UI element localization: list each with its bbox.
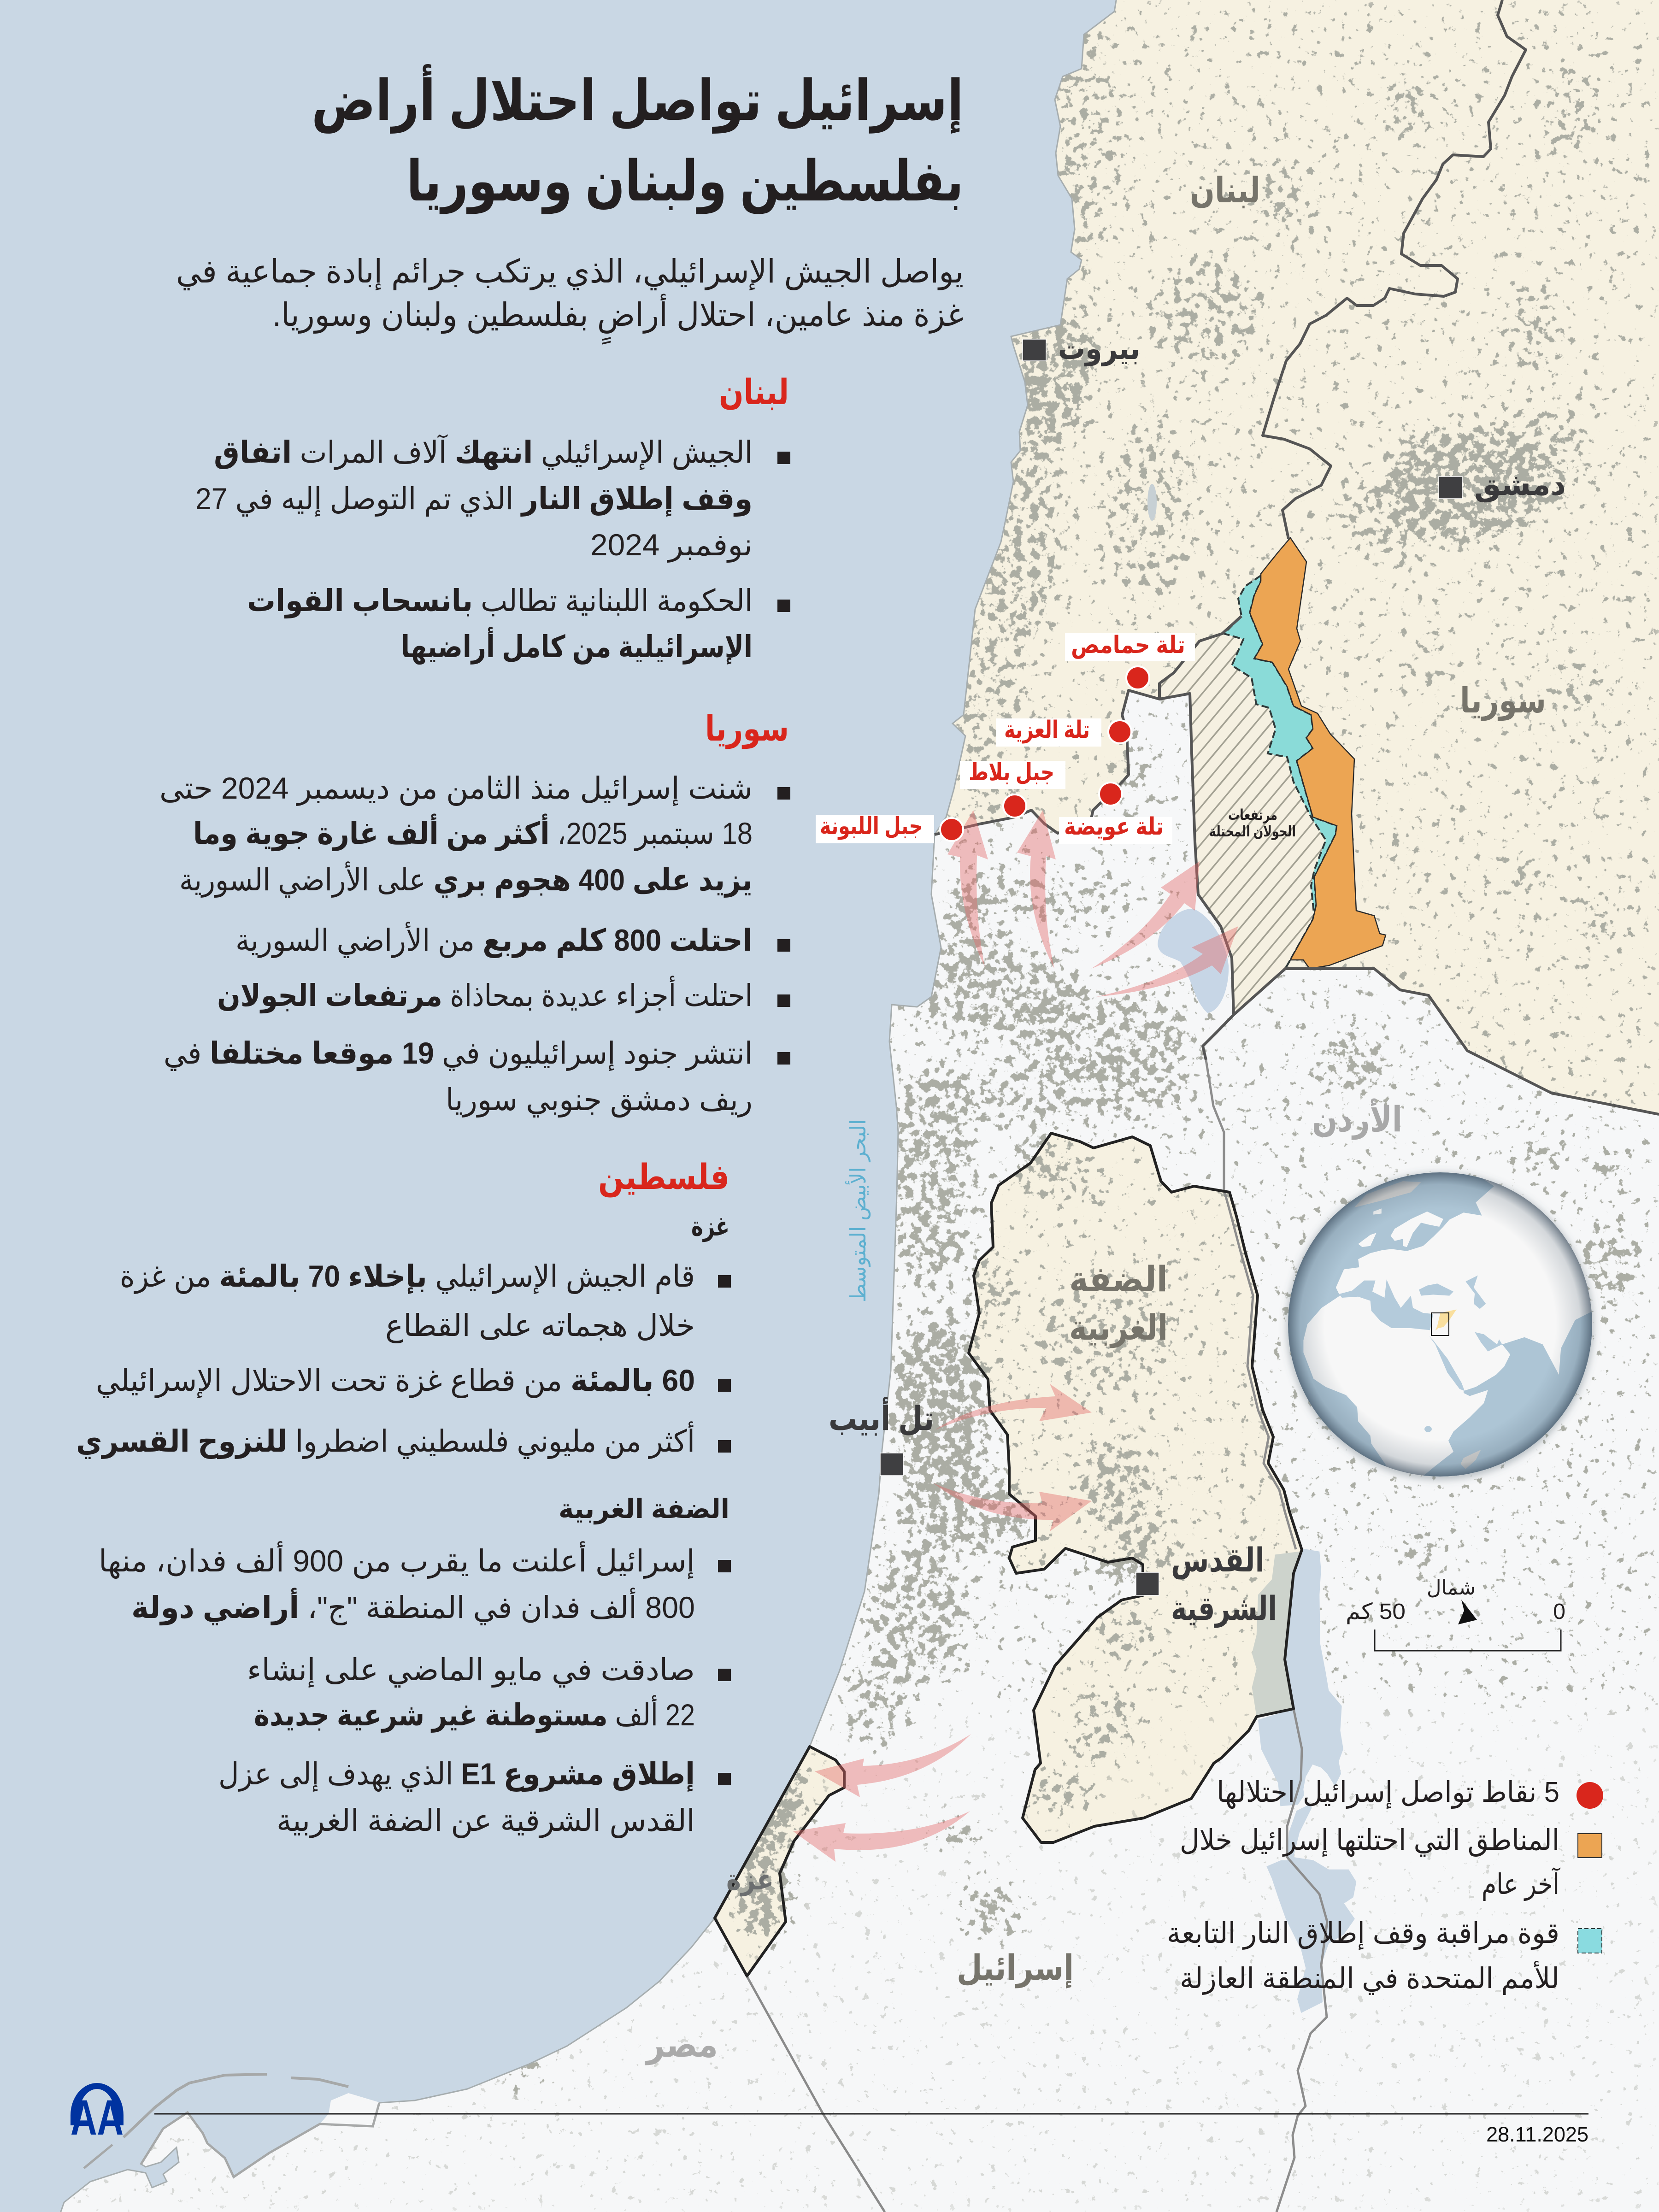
bullets: Gaza [76, 1259, 731, 1459]
bullets: Gaza: خلال هجماته على القطاع [385, 1308, 695, 1343]
map region: West Bank [969, 1133, 1302, 1842]
bullets: Syria: يزيد على 400 هجوم بري على الأراضي السورية [179, 861, 753, 898]
Jordan valley zone [1252, 1552, 1300, 1717]
bullets: Lebanon: نوفمبر 2024 [590, 528, 753, 563]
city: Beirut [1023, 331, 1140, 367]
legend item: occupied in last year [1180, 1824, 1602, 1901]
legend item: occupied in last year: المناطق التي احتلتها إسرائيل خلال [1180, 1824, 1559, 1857]
arrow: toward Gaza centre [793, 1811, 970, 1862]
advance arrows [793, 810, 1238, 1862]
bullets: Gaza: 60 بالمئة من قطاع غزة تحت الاحتلال الإسرائيلي [96, 1363, 695, 1398]
logo: Anadolu Agency [71, 2083, 124, 2145]
bullets: West Bank [99, 1541, 731, 1838]
Dead Sea south basin [1266, 1805, 1356, 2013]
map labels: countries and regions: لبنان [1190, 171, 1260, 210]
footer rule [154, 2113, 1588, 2114]
map labels: countries and regions: الغربية [1069, 1308, 1168, 1348]
callout: Jabal Blat [960, 759, 1065, 818]
heading: Palestine: فلسطين [598, 1158, 729, 1198]
map labels: countries and regions: إسرائيل [957, 1948, 1074, 1988]
legend item: UN force: قوة مراقبة وقف إطلاق النار التابعة [1167, 1918, 1559, 1950]
bullets: West Bank: صادقت في مايو الماضي على إنشاء [247, 1653, 695, 1688]
legend [1167, 1777, 1603, 1995]
arrow: toward Jabal al-Labbouneh [947, 810, 988, 967]
lake: Sea of Galilee [1158, 909, 1229, 1013]
city: Tel Aviv [829, 1397, 934, 1476]
label: occupied Golan Heights [1209, 806, 1296, 840]
map labels: countries and regions: غزة [726, 1864, 774, 1896]
intro text [176, 253, 964, 345]
city: Tel Aviv: تل أبيب [829, 1397, 934, 1437]
arrow: toward West Bank north [935, 1384, 1092, 1430]
Bardawil lagoon land patch and sandbar [84, 2074, 379, 2177]
bullets: Gaza: قام الجيش الإسرائيلي بإخلاء 70 بالمئة من غزة [120, 1259, 695, 1294]
bullets: Syria: انتشر جنود إسرائيليون في 19 موقعا مختلفا في [164, 1036, 753, 1071]
bullets: West Bank: إسرائيل أعلنت ما يقرب من 900 ألف فدان، منها [99, 1541, 695, 1579]
callout: Jabal al-Labbouneh: جبل اللبونة [820, 813, 923, 840]
scale bar: 0 [1553, 1600, 1565, 1624]
map labels: countries and regions: الأردن [1312, 1098, 1402, 1140]
label: occupied Golan Heights: مرتفعات [1228, 806, 1277, 824]
bullets: Syria: احتلت 800 كلم مربع من الأراضي السورية [235, 921, 753, 958]
bullets: Syria: شنت إسرائيل منذ الثامن من ديسمبر 2024 حتى [159, 771, 753, 806]
city: East Jerusalem: القدس [1171, 1542, 1265, 1579]
city: East Jerusalem [1136, 1542, 1277, 1628]
map region: Gaza [715, 1747, 844, 1976]
city: East Jerusalem: الشرقية [1171, 1590, 1277, 1628]
heading: Syria: سوريا [705, 709, 789, 749]
callout: Tel Hamames [1065, 632, 1195, 689]
bullets: West Bank: 22 ألف مستوطنة غير شرعية جديدة [254, 1695, 695, 1733]
scale bar [1346, 1600, 1565, 1651]
title [312, 64, 964, 214]
arrow: toward West Bank centre [933, 1483, 1092, 1531]
legend item: UN force: للأمم المتحدة في المنطقة العازلة [1180, 1960, 1559, 1995]
title: إسرائيل تواصل احتلال أراض [312, 64, 964, 134]
city: Damascus [1439, 467, 1566, 503]
Dead Sea and Jordan valley [1252, 1548, 1356, 2013]
north arrow [1427, 1577, 1477, 1624]
locator globe [1281, 1166, 1599, 1490]
intro text: يواصل الجيش الإسرائيلي، الذي يرتكب جرائم إبادة جماعية في [176, 253, 964, 291]
bullets: Lebanon: الجيش الإسرائيلي انتهك آلاف المرات اتفاق [214, 434, 753, 471]
arrow: toward Golan north [1091, 861, 1200, 969]
map labels: countries and regions: مصر [644, 2025, 718, 2065]
callout: Tel Owaida [1059, 782, 1172, 844]
heading: Lebanon: لبنان [719, 373, 789, 412]
scale bar: 50 كم [1346, 1600, 1406, 1624]
map region: Lebanon and Syria [935, 0, 1659, 1114]
bullets: Syria: احتلت أجزاء عديدة بمحاذاة مرتفعات الجولان [217, 976, 753, 1014]
arrow: toward Gaza north [815, 1734, 971, 1797]
intro text: غزة منذ عامين، احتلال أراضٍ بفلسطين ولبنان وسوريا. [272, 294, 964, 345]
bullets: Syria: ريف دمشق جنوبي سوريا [446, 1082, 753, 1118]
bullets: Syria [159, 771, 790, 1118]
subheading: West Bank: الضفة الغربية [559, 1494, 729, 1525]
bullets: Syria: 18 سبتمبر 2025، أكثر من ألف غارة جوية وما [193, 813, 753, 852]
callout: Tel al-Aziya: تلة العزية [1004, 717, 1090, 744]
label: occupied Golan Heights: الجولان المحتلة [1209, 823, 1296, 840]
bullets: Lebanon: الحكومة اللبنانية تطالب بانسحاب القوات [247, 583, 753, 619]
lake: Qaraoun [1147, 484, 1157, 521]
callout: Tel Owaida: تلة عويضة [1064, 813, 1164, 841]
north arrow: شمال [1427, 1577, 1476, 1599]
callout: Jabal Blat: جبل بلاط [969, 759, 1054, 786]
city: Beirut: بيروت [1058, 331, 1140, 367]
legend item: occupied in last year: آخر عام [1482, 1867, 1560, 1901]
arrow: toward Jabal Blat [1017, 810, 1056, 969]
Dead Sea north basin [1258, 1548, 1343, 1806]
legend item: five points: 5 نقاط تواصل إسرائيل احتلالها [1217, 1777, 1559, 1809]
bullets: Gaza: أكثر من مليوني فلسطيني اضطروا للنزوح القسري [76, 1421, 695, 1459]
subheading: Gaza: غزة [691, 1212, 729, 1242]
bullets: Lebanon [195, 434, 790, 665]
occupied Golan Heights hatched area [1159, 634, 1326, 1015]
label: Mediterranean Sea: البحر الأبيض المتوسط [845, 1119, 871, 1302]
West Bank border [969, 1133, 1302, 1842]
legend item: UN force [1167, 1918, 1602, 1995]
bullets: West Bank: القدس الشرقية عن الضفة الغربية [276, 1803, 695, 1838]
map labels: countries and regions: سوريا [1460, 681, 1546, 721]
bullets: West Bank: 800 ألف فدان في المنطقة "ج"، أراضي دولة [131, 1588, 695, 1626]
date: 28.11.2025 [1486, 2123, 1588, 2146]
callout: Tel Hamames: تلة حمامص [1071, 632, 1185, 659]
bullets: Lebanon: وقف إطلاق النار الذي تم التوصل إليه في 27 [195, 482, 753, 517]
Mediterranean Sea [0, 0, 1117, 2212]
map labels: countries and regions [644, 171, 1546, 2065]
newly occupied area [1250, 538, 1386, 969]
bullets: West Bank: إطلاق مشروع E1 الذي يهدف إلى عزل [218, 1757, 695, 1792]
logo: Anadolu Agency: AA [71, 2089, 124, 2145]
Gaza border [715, 1747, 844, 1976]
bullets: Lebanon: الإسرائيلية من كامل أراضيها [401, 627, 753, 665]
city: Damascus: دمشق [1474, 467, 1566, 503]
map labels: countries and regions: الضفة [1069, 1260, 1168, 1299]
title: بفلسطين ولبنان وسوريا [406, 150, 964, 214]
country borders [747, 0, 1659, 2212]
arrow: toward Golan south [1096, 926, 1238, 997]
UN buffer zone [1224, 576, 1337, 969]
